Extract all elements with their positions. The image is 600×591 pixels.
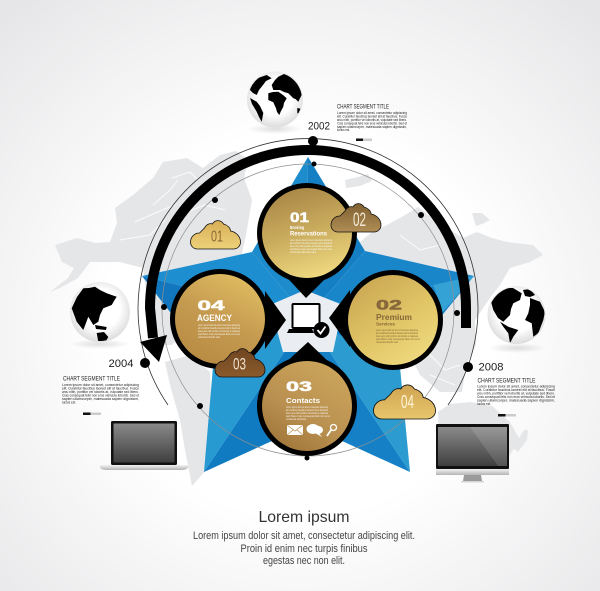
icon: laptop bbox=[100, 421, 189, 470]
text block: 2004 segment: CHART SEGMENT TITLE bbox=[63, 376, 120, 382]
text block: 2008 segment: luctus est. bbox=[477, 402, 491, 406]
world map background bbox=[50, 151, 543, 486]
panel: circle 01 Booking Reservations: Booking bbox=[290, 225, 304, 230]
text block: 2008 segment: sapien ullamcorper, malesuada sapien dignissim, bbox=[477, 398, 555, 402]
panel: circle 03 Contacts: 03 bbox=[286, 378, 312, 394]
star bbox=[142, 157, 474, 472]
icon: magnifier bbox=[327, 424, 336, 436]
panel: circle 01 Booking Reservations: Lorem ipsum dolor sit amet consectetur adipiscing bbox=[290, 238, 332, 242]
panel: circle 04 Agency: elit curabitur faucibus laoreet elit at faucibus bbox=[198, 326, 241, 330]
panel: circle 02 Premium Services: 02 bbox=[376, 296, 402, 312]
text block: 2002 segment: Cras consequat felis non eros vehicula lobortis. Sed et bbox=[337, 122, 407, 126]
label: 2008: 2008 bbox=[478, 362, 504, 374]
text block: 2004 segment: elit. Curabitur faucibus laoreet elit at faucibus. Fusce bbox=[62, 386, 139, 390]
panel: circle 02 Premium Services bbox=[329, 270, 443, 370]
panel: circle 04 Agency: vehicula lobortis sed bbox=[198, 335, 221, 339]
panel: circle 03 Contacts: vehicula lobortis bbox=[286, 417, 307, 421]
icon: left globe bbox=[70, 282, 130, 349]
text block: 2002 segment: luctus est. bbox=[337, 128, 350, 132]
icon: desktop monitor bbox=[436, 424, 509, 482]
panel: circle 03 Contacts: elit curabitur faucibus laoreet elit at faucibus bbox=[286, 408, 329, 412]
text block: 2004 segment: sapien ullamcorper, malesuada sapien dignissim, bbox=[62, 397, 139, 401]
panel: circle 04 Agency: AGENCY bbox=[197, 313, 232, 323]
pager: 2004 bbox=[83, 412, 101, 415]
panel: circle 02 Premium Services: vehicula lobortis sed bbox=[376, 340, 399, 344]
text block: 2008 segment: Cras consequat felis non eros vehicula lobortis. Sed et bbox=[477, 395, 555, 399]
panel: circle 02 Premium Services: Services bbox=[376, 322, 395, 326]
cloud 04 bbox=[374, 385, 436, 419]
text block: 2004 segment: Lorem ipsum dolor sit amet, consectetur adipiscing bbox=[62, 383, 139, 387]
panel: circle 03 Contacts: Contacts bbox=[286, 396, 320, 405]
cloud 03: 03 bbox=[233, 354, 246, 374]
icon: speech bubbles bbox=[306, 424, 323, 437]
text block: 2004 segment: Cras consequat felis non eros vehicula lobortis. Sed et bbox=[62, 394, 139, 398]
thin outer ring bbox=[138, 139, 478, 405]
cloud 02: 02 bbox=[353, 210, 366, 231]
panel: circle 01 Booking Reservations: vehicula lobortis sed bbox=[290, 250, 317, 254]
panel: circle 03 Contacts: fusce arcu nibh porttitor vel lobortis at vulputate bbox=[286, 411, 328, 415]
panel: circle 02 Premium Services: sed libero cras consequat felis non eros bbox=[376, 337, 421, 341]
pager: 2008 bbox=[498, 414, 516, 416]
text block: 2002 segment bbox=[337, 104, 407, 132]
icon: centre laptop with check mark bbox=[287, 304, 330, 338]
text block: footer copy: Proin id enim nec turpis finibus bbox=[240, 543, 368, 555]
pager: 2002 bbox=[356, 138, 372, 141]
panel: circle 02 Premium Services: elit curabitur faucibus laoreet elit at faucibus bbox=[376, 331, 419, 335]
text block: 2004 segment bbox=[62, 376, 139, 404]
text block: 2002 segment: arcu nibh, porttitor vel lobortis at, vulputate sed libero. bbox=[337, 118, 407, 122]
panel: circle 02 Premium Services: Lorem ipsum dolor sit amet consectetur adipiscing bbox=[376, 328, 418, 332]
text block: 2004 segment: arcu nibh, porttitor vel lobortis at, vulputate sed libero. bbox=[62, 390, 139, 394]
icon: top globe bbox=[247, 72, 303, 134]
cloud 01: 01 bbox=[211, 228, 223, 246]
panel: circle 01 Booking Reservations: Reservations bbox=[290, 230, 327, 238]
text block: footer copy: Lorem ipsum dolor sit amet, consectetur adipiscing elit. bbox=[193, 530, 415, 542]
ring dots bbox=[140, 136, 473, 460]
text block: 2008 segment: Lorem ipsum dolor sit amet, consectetur adipiscing bbox=[477, 384, 555, 388]
panel: circle 01 Booking Reservations: 01 bbox=[290, 209, 309, 225]
panel: circle 03 Contacts: Lorem ipsum dolor sit amet consectetur adipiscing bbox=[286, 405, 328, 409]
panel: circle 03 Contacts bbox=[257, 342, 357, 456]
icon: right globe bbox=[488, 286, 546, 353]
cloud 04: 04 bbox=[401, 392, 414, 412]
panel: circle 01 Booking Reservations: elit curabitur faucibus laoreet elit at faucibus bbox=[290, 241, 333, 245]
label: 2002: 2002 bbox=[308, 120, 330, 132]
text block: 2002 segment: sapien ullamcorper, malesuada sapien dignissim, bbox=[337, 125, 407, 129]
text block: 2002 segment: CHART SEGMENT TITLE bbox=[337, 104, 389, 110]
circular arrow bbox=[140, 150, 466, 362]
panel: circle 01 Booking Reservations bbox=[257, 183, 357, 298]
text block: 2008 segment bbox=[477, 378, 555, 406]
icon: envelope bbox=[287, 425, 303, 435]
cloud 02 bbox=[331, 204, 381, 232]
centre white pentagon bbox=[270, 290, 343, 352]
text block: footer copy: egestas nec non elit. bbox=[263, 555, 345, 567]
text block: footer copy bbox=[193, 530, 415, 567]
panel: circle 01 Booking Reservations: fusce arcu nibh porttitor vel lobortis at vulputate bbox=[290, 244, 332, 248]
panel: circle 04 Agency: 04 bbox=[198, 297, 225, 313]
label: 2004: 2004 bbox=[108, 358, 134, 370]
text block: 2008 segment: CHART SEGMENT TITLE bbox=[478, 378, 536, 384]
panel: circle 04 Agency: sed libero cras consequat felis non eros bbox=[198, 332, 241, 336]
cloud 03 bbox=[215, 349, 265, 377]
text block: 2002 segment: Lorem ipsum dolor sit amet, consectetur adipiscing bbox=[337, 111, 407, 115]
panel: circle 02 Premium Services: fusce arcu nibh porttitor vel lobortis at vulputate bbox=[376, 334, 418, 338]
panel: circle 02 Premium Services: Premium bbox=[376, 313, 412, 322]
panel: circle 04 Agency: Lorem ipsum dolor sit amet consectetur adipiscing bbox=[198, 323, 240, 327]
panel: circle 04 Agency bbox=[170, 269, 286, 369]
cloud 01 bbox=[190, 221, 240, 249]
panel: circle 03 Contacts: sed libero cras consequat felis non eros bbox=[286, 414, 331, 418]
thin inner ring bbox=[162, 164, 454, 456]
text block: 2008 segment: elit. Curabitur faucibus laoreet elit at faucibus. Fusce bbox=[477, 388, 555, 392]
panel: circle 04 Agency: fusce arcu nibh porttitor vel lobortis at vulputate bbox=[198, 329, 240, 333]
panel: circle 01 Booking Reservations: sed libero cras consequat felis non eros bbox=[290, 247, 333, 251]
text block: 2002 segment: elit. Curabitur faucibus laoreet elit at faucibus. Fusce bbox=[337, 114, 407, 118]
text block: 2004 segment: luctus est. bbox=[62, 400, 76, 404]
text block: 2008 segment: arcu nibh, porttitor vel lobortis at, vulputate sed libero. bbox=[477, 392, 555, 396]
heading: Lorem ipsum: Lorem ipsum bbox=[258, 509, 350, 526]
